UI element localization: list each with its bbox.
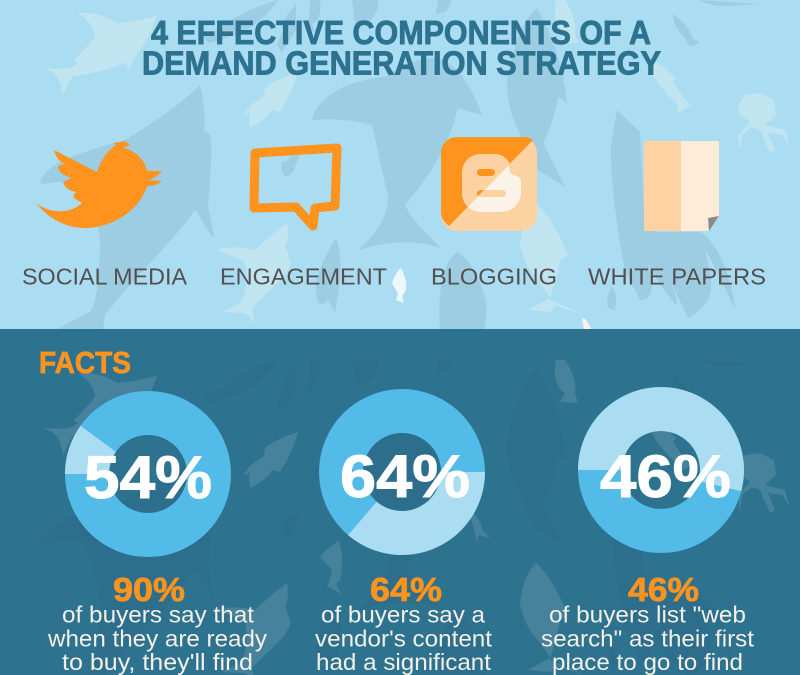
title: DEMAND GENERATION STRATEGY <box>142 44 661 82</box>
donut chart 1: 54% <box>84 444 212 511</box>
fact 3 text: place to go to find <box>552 649 743 675</box>
icon: white paper <box>644 141 719 231</box>
fact 1 text: when they are ready <box>47 626 268 652</box>
fact 1 text: 90% <box>113 571 185 608</box>
component labels: ENGAGEMENT <box>220 264 387 290</box>
light blue background panel <box>0 0 800 329</box>
background sea creatures, top section <box>40 0 790 330</box>
donut chart 1 <box>65 391 231 557</box>
donut chart 2 <box>319 389 485 555</box>
component labels: WHITE PAPERS <box>588 264 766 290</box>
dark facts panel <box>0 329 800 675</box>
component labels: BLOGGING <box>431 264 557 290</box>
fact 3 text <box>541 571 755 675</box>
fact 2 text: of buyers say a <box>321 602 485 628</box>
component labels <box>22 264 766 290</box>
component labels: SOCIAL MEDIA <box>22 264 187 290</box>
fact 2 text: vendor's content <box>315 626 493 652</box>
facts heading: FACTS <box>39 346 131 380</box>
background sea creatures, facts section <box>40 360 790 675</box>
fact 2 text <box>315 571 493 675</box>
icon: speech bubble <box>254 148 337 226</box>
donut chart 3: 46% <box>600 443 731 510</box>
fact 2 text: 64% <box>370 571 442 608</box>
title: 4 EFFECTIVE COMPONENTS OF A <box>151 14 651 51</box>
title <box>142 14 661 82</box>
fact 1 text: of buyers say that <box>62 602 255 628</box>
icon: blogger <box>441 137 537 231</box>
fact 2 text: had a significant <box>316 649 492 675</box>
fact 3 text: 46% <box>628 571 699 608</box>
icon: twitter bird <box>36 141 162 228</box>
donut chart 3 <box>578 387 744 553</box>
donut chart 2: 64% <box>340 443 470 510</box>
fact 3 text: of buyers list "web <box>549 602 746 628</box>
fact 3 text: search" as their first <box>541 626 755 652</box>
fact 1 text: to buy, they'll find <box>62 649 253 675</box>
fact 1 text <box>47 571 268 675</box>
